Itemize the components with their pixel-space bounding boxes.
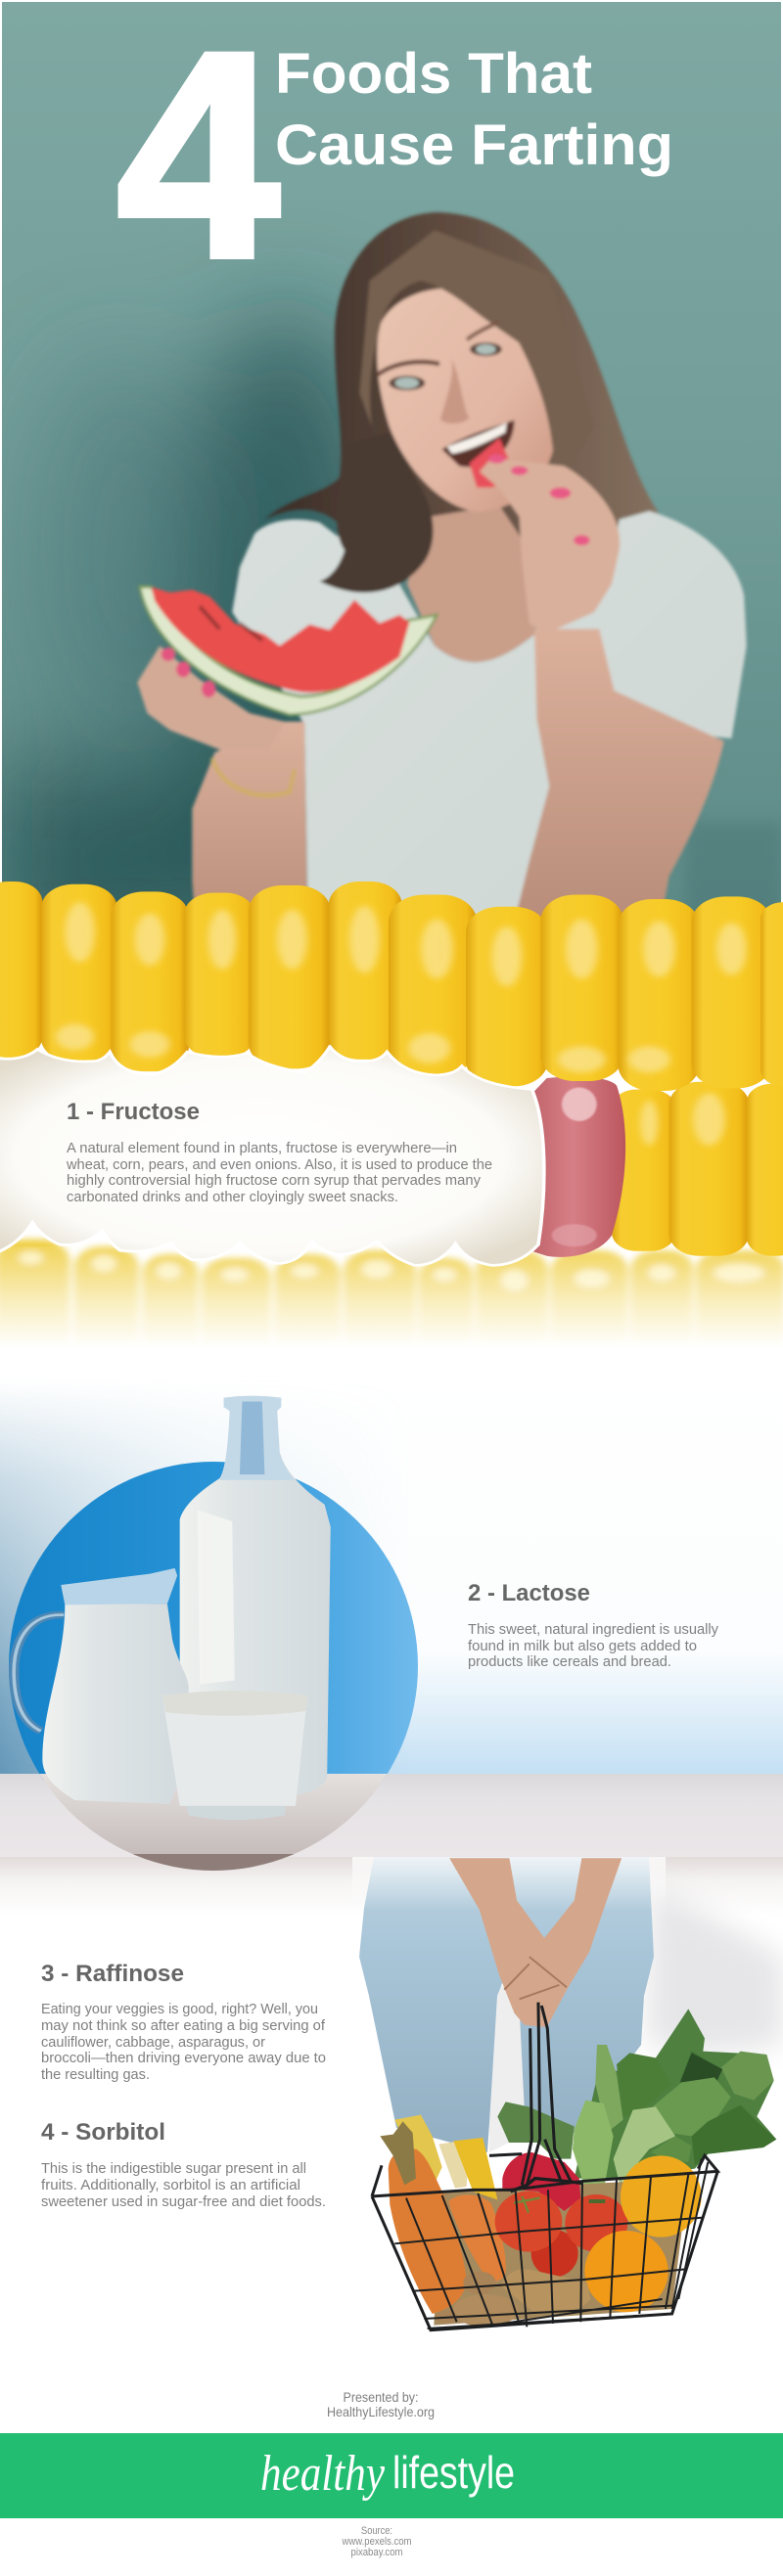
carrots	[380, 2121, 506, 2314]
text: source credits: Source:	[361, 2525, 392, 2537]
shirt	[230, 509, 749, 914]
title number 4: 4	[116, 0, 282, 319]
face	[377, 289, 554, 512]
jug	[14, 1568, 189, 1804]
text: fructose description	[66, 1141, 492, 1205]
red pepper	[502, 2152, 580, 2211]
watermelon bite	[470, 438, 517, 487]
left hand	[137, 646, 285, 749]
text: lactose description: This sweet, natural ingredient is usually	[468, 1622, 719, 1638]
text: lactose description: found in milk but also gets added to	[468, 1639, 697, 1654]
title: Cause Farting	[275, 113, 673, 177]
text: sorbitol description: fruits. Additionally, sorbitol is an artificial	[41, 2178, 300, 2193]
right arm	[517, 627, 726, 918]
heading: 1 - Fructose: 1 - Fructose	[67, 1099, 200, 1125]
heading: 4 - Sorbitol: 4 - Sorbitol	[41, 2119, 165, 2146]
text: lactose description	[468, 1622, 719, 1670]
scalloped text panel	[0, 1047, 544, 1265]
text: presented by	[327, 2389, 435, 2419]
bottle	[180, 1396, 331, 1794]
text: fructose description: carbonated drinks and other cloyingly sweet snacks.	[67, 1190, 398, 1205]
text: presented by: Presented by:	[343, 2389, 419, 2405]
leafy greens	[497, 2009, 776, 2192]
eyes and brows	[377, 321, 502, 424]
neck	[407, 506, 536, 662]
text: lactose description: products like cereals and bread.	[468, 1654, 671, 1670]
logo: healthy lifestyle: healthy	[260, 2446, 386, 2502]
jeans	[359, 1857, 654, 2152]
text: raffinose description: may not think so after eating a big serving of	[41, 2018, 326, 2034]
hair back	[265, 210, 659, 536]
text: source credits	[342, 2525, 411, 2558]
left arm	[190, 719, 309, 903]
footer banner	[0, 2433, 783, 2518]
mouth with teeth	[442, 420, 515, 467]
text: source credits: pixabay.com	[350, 2547, 403, 2558]
title	[275, 42, 673, 177]
title: Foods That	[275, 42, 592, 106]
basket handle	[522, 2003, 571, 2185]
text: sorbitol description	[41, 2161, 326, 2210]
text: fructose description: highly controversial high fructose corn syrup that pervades many	[67, 1173, 482, 1189]
arms and hands	[449, 1858, 622, 2027]
text: raffinose description: Eating your veggies is good, right? Well, you	[41, 2002, 318, 2017]
text: source credits: www.pexels.com	[342, 2536, 411, 2548]
illustration: basket of vegetables	[372, 2003, 776, 2330]
potatoes	[436, 2270, 590, 2327]
heading: 2 - Lactose: 2 - Lactose	[468, 1580, 590, 1606]
text: presented by: HealthyLifestyle.org	[327, 2404, 435, 2419]
bracelet	[212, 758, 295, 795]
panel: hero photo of woman eating watermelon	[0, 2, 783, 1011]
basket interior backing	[434, 2179, 688, 2326]
text: sorbitol description: sweetener used in sugar-free and diet foods.	[41, 2194, 326, 2210]
glass of milk	[162, 1691, 308, 1820]
text: raffinose description	[41, 2002, 326, 2083]
milk bottle, jug and glass	[14, 1396, 331, 1820]
logo: healthy lifestyle: lifestyle	[392, 2447, 515, 2498]
panel: jeans and arms	[352, 1857, 783, 2152]
text: raffinose description: the resulting gas.	[41, 2067, 150, 2083]
text: raffinose description: cauliflower, cabbage, asparagus, or	[41, 2035, 265, 2051]
text: fructose description: wheat, corn, pears, and even onions. Also, it is used to produce the	[66, 1157, 492, 1173]
front hair lock on shoulder	[320, 432, 434, 593]
second corn row	[612, 1082, 783, 1256]
watermelon slice	[140, 587, 437, 715]
tomatoes	[495, 2192, 627, 2277]
blurred lower corn row	[0, 1240, 783, 1367]
text: sorbitol description: This is the indigestible sugar present in all	[41, 2161, 306, 2177]
oranges	[584, 2155, 702, 2312]
top corn kernels	[0, 881, 783, 1091]
text: fructose description: A natural element found in plants, fructose is everywhere—in	[67, 1141, 457, 1156]
panel: milk photo circle	[0, 1458, 431, 1883]
fingernails	[161, 648, 215, 698]
table	[0, 1774, 783, 1857]
panel: corn section	[0, 881, 783, 1399]
red kernel	[530, 1076, 625, 1257]
text: raffinose description: broccoli—then driving everyone away due to	[41, 2051, 326, 2066]
hair over forehead	[358, 230, 556, 450]
corn cobs	[394, 2115, 497, 2199]
wire basket	[372, 2003, 717, 2330]
right hand	[480, 454, 620, 635]
panel: milk section background	[0, 1370, 783, 1916]
heading: 3 - Raffinose: 3 - Raffinose	[41, 1961, 184, 1987]
logo: healthy lifestyle	[260, 2446, 515, 2502]
kernel highlights	[56, 902, 747, 1146]
